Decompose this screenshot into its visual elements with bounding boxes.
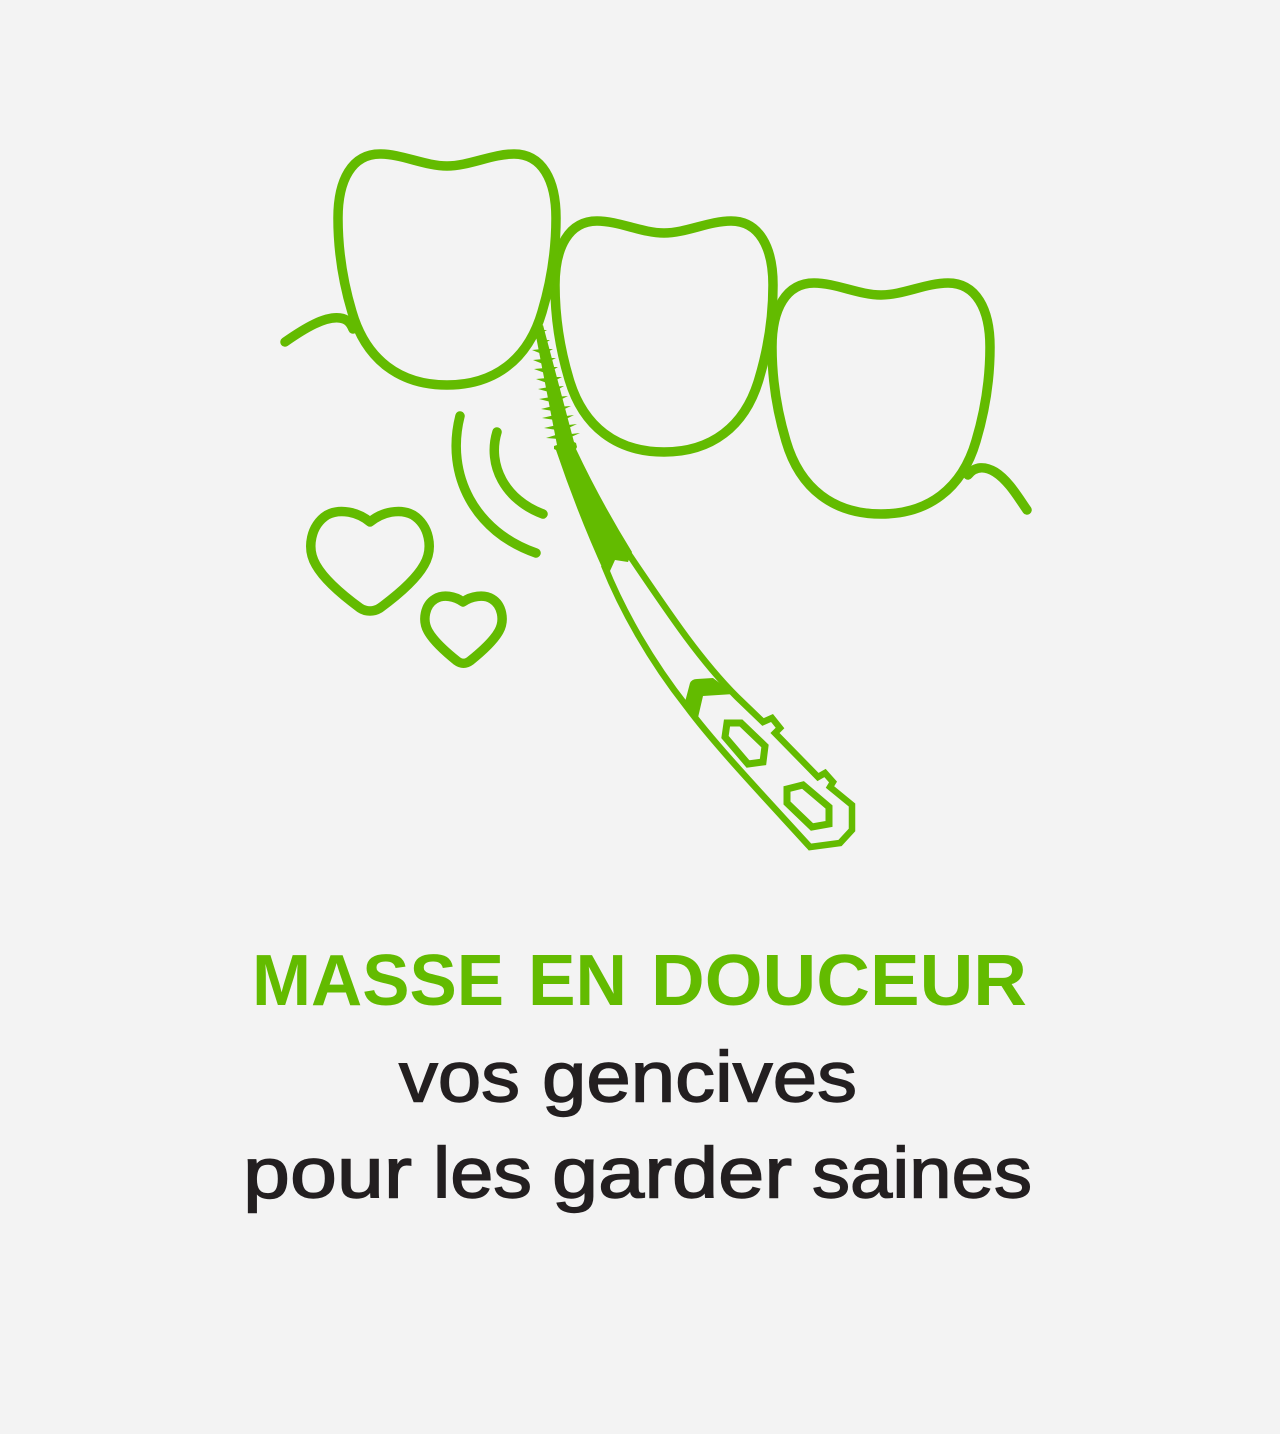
text line: vos gencives: gencives <box>542 1038 857 1118</box>
heading: DOUCEUR <box>651 941 1027 1021</box>
heading: MASSE <box>252 941 504 1021</box>
gum line left <box>285 318 353 342</box>
icon: large heart <box>311 511 429 611</box>
icon: tooth 2 <box>555 221 773 452</box>
icon: small heart <box>425 596 502 663</box>
text line: pour les garder saines: saines <box>812 1134 1032 1214</box>
handle wedge <box>685 678 734 722</box>
text line: pour les garder saines <box>243 1134 1032 1214</box>
text line: vos gencives <box>399 1038 857 1118</box>
handle outline <box>604 553 852 847</box>
gum line right <box>968 468 1027 510</box>
text line: vos gencives: vos <box>399 1038 520 1118</box>
brush wire, collar and solid neck <box>535 325 632 574</box>
heading: EN <box>528 941 627 1021</box>
icon: interdental brush <box>532 325 852 847</box>
massage arc inner <box>494 432 543 514</box>
brush bristles <box>532 330 580 441</box>
illustration: teeth, gums, arcs and hearts <box>285 154 1027 663</box>
text line: pour les garder saines: pour <box>243 1134 412 1214</box>
massage arc outer <box>456 416 536 553</box>
handle hole 1 <box>725 723 765 764</box>
icon: tooth 3 <box>772 283 990 514</box>
icon: tooth 1 <box>338 154 556 385</box>
handle hole 2 <box>787 785 829 827</box>
text line: pour les garder saines: les <box>433 1134 532 1214</box>
heading <box>252 941 1027 1021</box>
text line: pour les garder saines: garder <box>552 1134 792 1214</box>
